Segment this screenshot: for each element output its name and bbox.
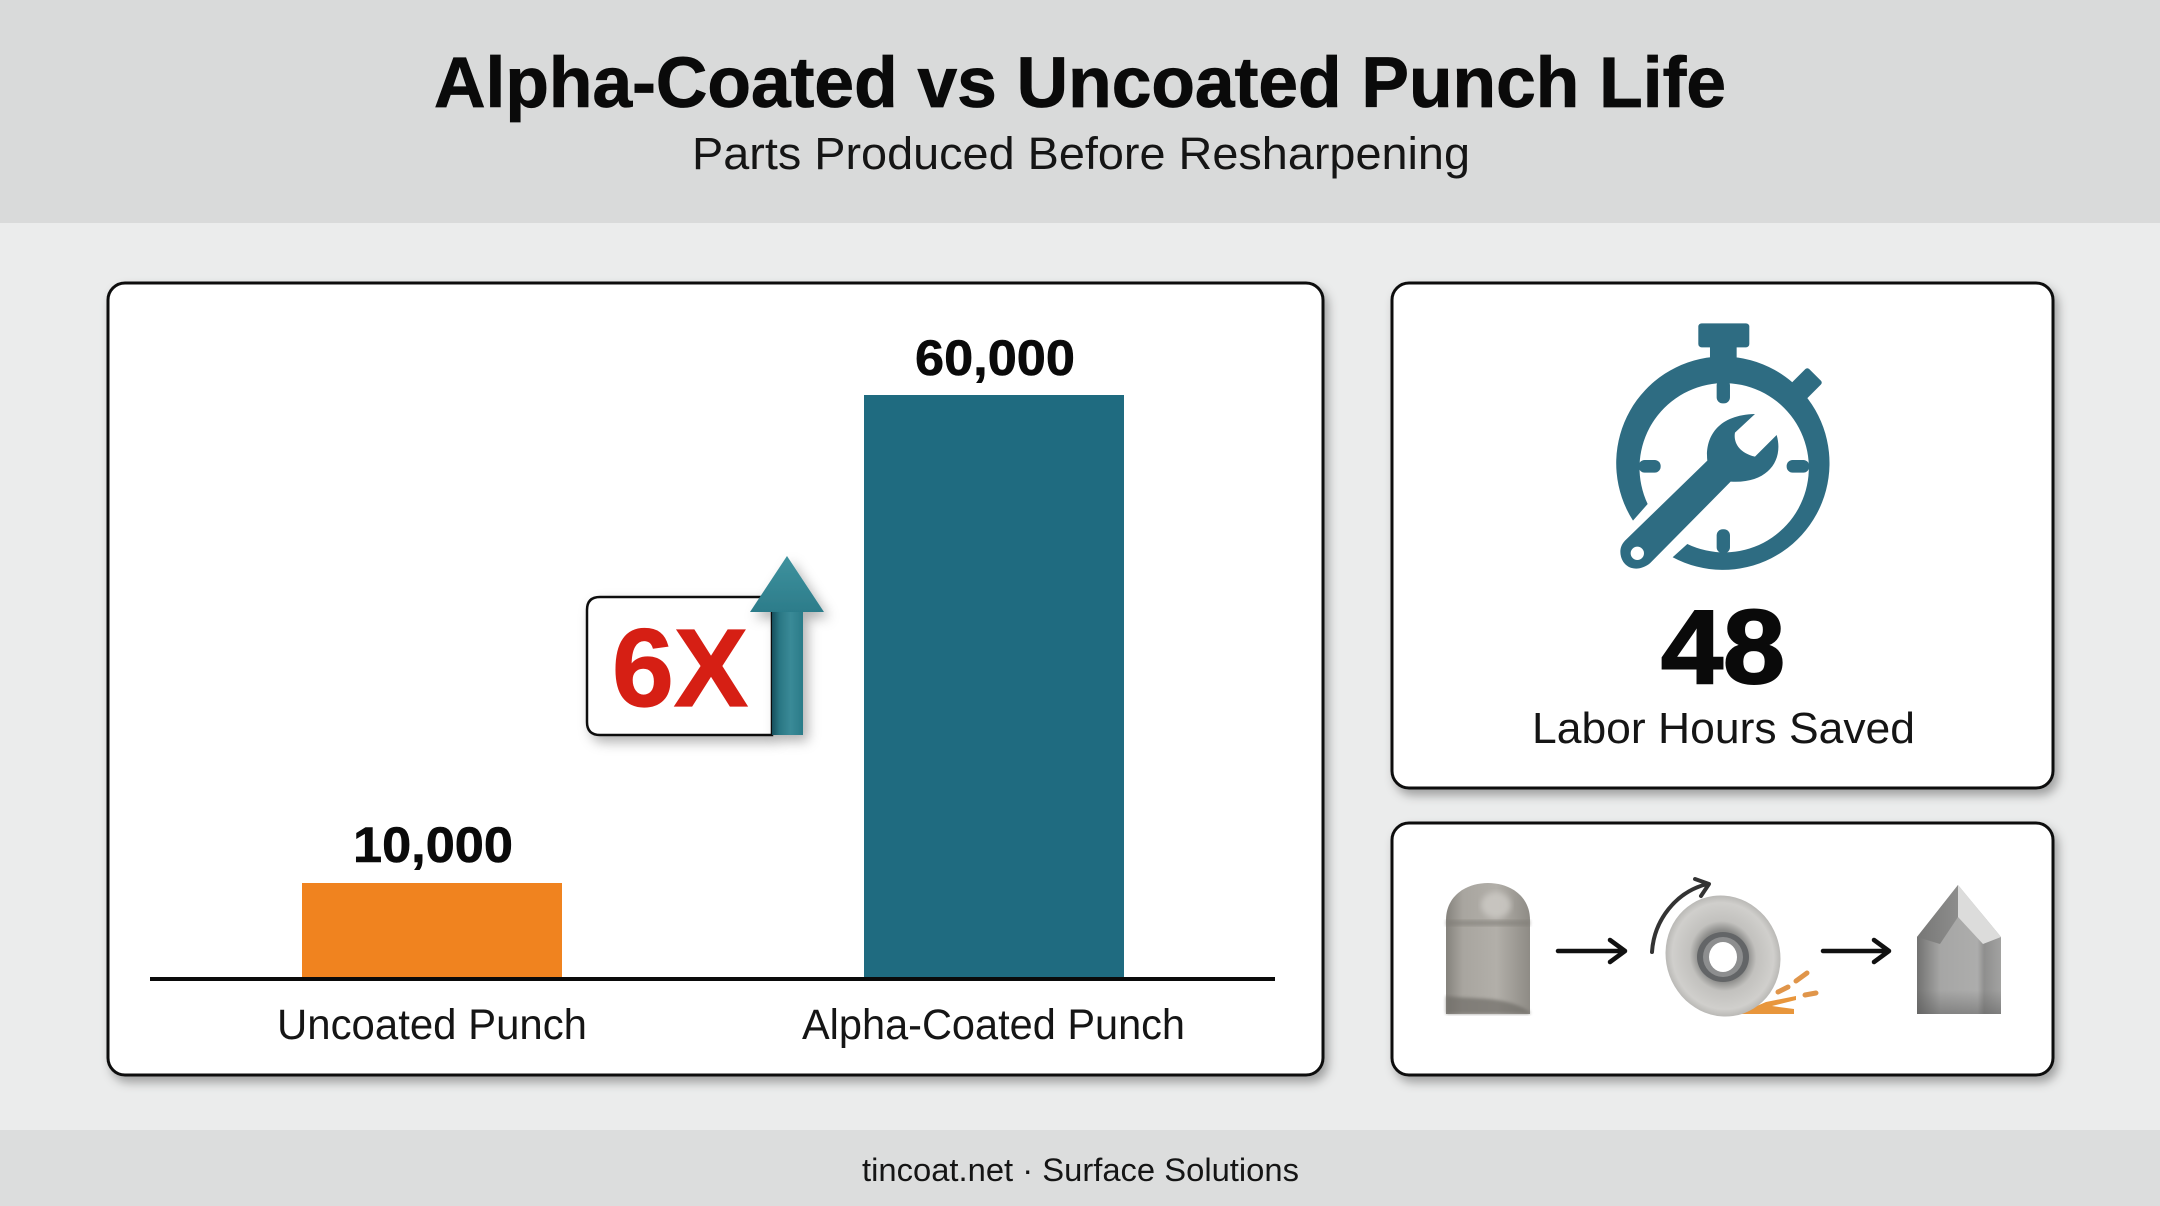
bar: uncoated punch	[302, 883, 562, 979]
value label: 60,000: 60,000	[915, 330, 1075, 386]
callout: 6X multiplier	[587, 556, 824, 735]
icon: stopwatch with wrench	[1616, 323, 1830, 570]
category label: alpha-coated punch: Alpha-Coated Punch	[802, 1001, 1185, 1049]
value label: 10,000: 10,000	[353, 817, 513, 873]
category label: uncoated punch: Uncoated Punch	[277, 1001, 587, 1049]
icon: worn rounded punch	[1446, 883, 1530, 1014]
panel: bar chart	[108, 283, 1323, 1075]
stat label: labor hours saved: Labor Hours Saved	[1532, 704, 1915, 753]
header band	[0, 0, 2160, 223]
footer text: tincoat.net · Surface Solutions	[862, 1152, 1299, 1188]
icon: sharpened pointed punch	[1917, 885, 2001, 1014]
stat: 48: 48	[1661, 589, 1785, 706]
title: Alpha-Coated vs Uncoated Punch Life	[434, 44, 1726, 123]
panel: resharpening process	[1392, 823, 2053, 1075]
icon: grinding wheel with sparks	[1649, 879, 1816, 1033]
arrow: upward increase	[750, 556, 824, 735]
6X text: 6X	[612, 607, 748, 730]
panel: labor hours saved	[1392, 283, 2053, 788]
arrow: to sharpened punch	[1823, 940, 1889, 962]
subtitle: Parts Produced Before Resharpening	[692, 128, 1470, 179]
arrow: to grinding wheel	[1558, 940, 1625, 962]
chart axis line	[150, 977, 1275, 981]
bar: alpha-coated punch	[864, 395, 1124, 979]
footer band	[0, 1130, 2160, 1206]
